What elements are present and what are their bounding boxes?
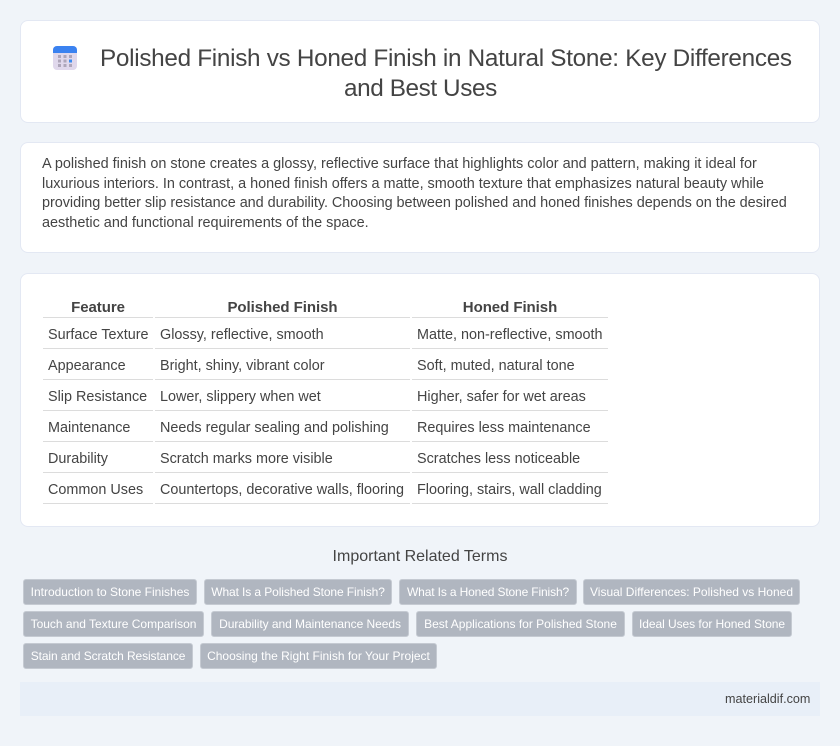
intro text: A polished finish on stone creates a glossy, reflective surface that highlights color and pattern, making it ideal for xyxy=(42,156,757,172)
row: surface texture: Glossy, reflective, smooth xyxy=(160,327,324,343)
row: durability: Durability xyxy=(48,451,108,467)
intro text: luxurious interiors. In contrast, a honed finish offers a matte, smooth texture that emphasizes natural beauty while xyxy=(42,176,764,192)
row: maintenance xyxy=(48,420,591,436)
related term tags: What Is a Honed Stone Finish? xyxy=(407,585,569,599)
related term tags: Choosing the Right Finish for Your Project xyxy=(207,649,430,663)
row: common uses: Common Uses xyxy=(48,482,143,498)
related term tags: Introduction to Stone Finishes xyxy=(31,585,189,599)
row: slip resistance: Slip Resistance xyxy=(48,389,147,405)
table header: Polished Finish xyxy=(227,299,338,316)
row: durability xyxy=(48,451,580,467)
row: common uses xyxy=(48,482,602,498)
intro text xyxy=(42,156,787,230)
row: appearance: Appearance xyxy=(48,358,126,374)
row: appearance: Soft, muted, natural tone xyxy=(417,358,575,374)
related term tags: Durability and Maintenance Needs xyxy=(219,617,401,631)
row: slip resistance xyxy=(48,389,586,405)
related term tags: Visual Differences: Polished vs Honed xyxy=(590,585,793,599)
table header: Honed Finish xyxy=(463,299,557,316)
table header xyxy=(71,299,557,316)
title xyxy=(100,45,792,102)
row: common uses: Flooring, stairs, wall cladding xyxy=(417,482,602,498)
row: durability: Scratch marks more visible xyxy=(160,451,333,467)
row: maintenance: Maintenance xyxy=(48,420,130,436)
related term tags: Stain and Scratch Resistance xyxy=(31,649,185,663)
header panel xyxy=(20,20,820,123)
related term tags: Touch and Texture Comparison xyxy=(31,617,196,631)
related terms heading: Important Related Terms xyxy=(333,548,507,565)
title: Polished Finish vs Honed Finish in Natural Stone: Key Differences xyxy=(100,45,792,72)
comparison table xyxy=(43,299,608,504)
footer bar xyxy=(20,682,820,716)
intro text: providing better slip resistance and durability. Choosing between polished and honed finishes depends on the desired xyxy=(42,195,787,211)
row: surface texture: Matte, non-reflective, smooth xyxy=(417,327,603,343)
row: surface texture: Surface Texture xyxy=(48,327,149,343)
row: slip resistance: Higher, safer for wet areas xyxy=(417,389,586,405)
row: maintenance: Needs regular sealing and polishing xyxy=(160,420,389,436)
related term tags: Ideal Uses for Honed Stone xyxy=(639,617,785,631)
row: surface texture xyxy=(48,327,603,343)
table panel xyxy=(20,273,820,527)
row: slip resistance: Lower, slippery when wet xyxy=(160,389,321,405)
row: common uses: Countertops, decorative walls, flooring xyxy=(160,482,404,498)
row: appearance xyxy=(48,358,575,374)
intro panel xyxy=(20,142,820,253)
footer source: materialdif.com xyxy=(725,692,810,706)
row: appearance: Bright, shiny, vibrant color xyxy=(160,358,324,374)
row: durability: Scratches less noticeable xyxy=(417,451,580,467)
title: and Best Uses xyxy=(344,75,497,102)
icon: calendar xyxy=(53,46,77,70)
related term tags xyxy=(23,579,800,669)
intro text: aesthetic and functional requirements of the space. xyxy=(42,214,369,230)
related term tags: Best Applications for Polished Stone xyxy=(424,617,617,631)
row: maintenance: Requires less maintenance xyxy=(417,420,591,436)
related term tags: What Is a Polished Stone Finish? xyxy=(211,585,385,599)
table header: Feature xyxy=(71,299,125,316)
